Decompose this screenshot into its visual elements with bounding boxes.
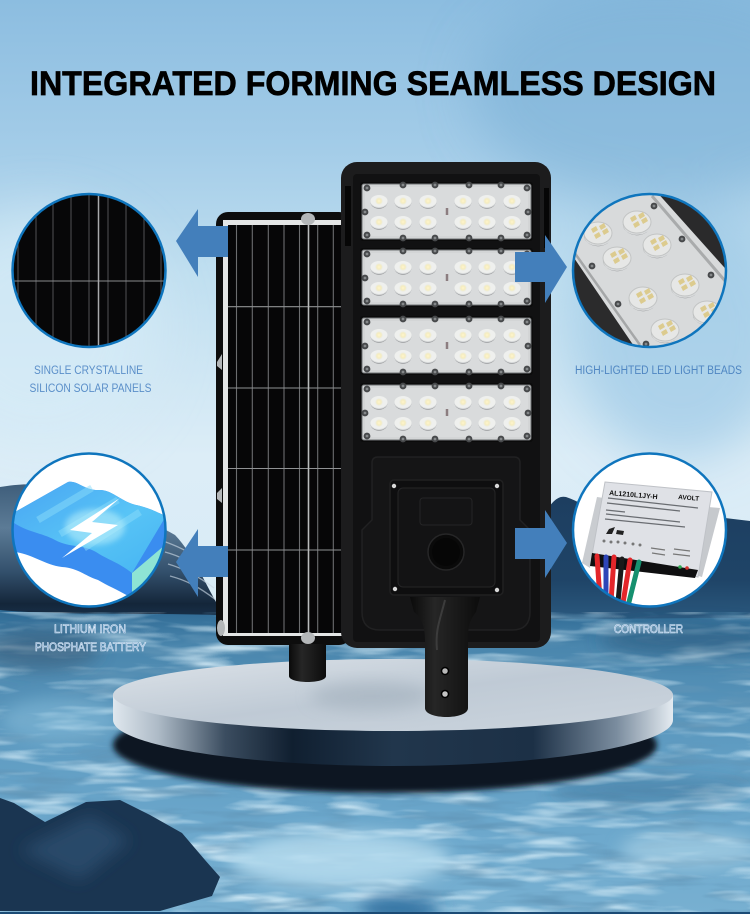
label: battery [35, 624, 146, 654]
title: INTEGRATED FORMING SEAMLESS DESIGN [30, 65, 716, 103]
bottom edge [0, 912, 750, 914]
background: ripples [0, 612, 750, 914]
LED module 1 [360, 182, 533, 241]
battery box cover [362, 457, 530, 630]
panel clips [217, 213, 315, 644]
LED module 3 [360, 316, 533, 375]
LED module 4 [360, 383, 533, 442]
background: water haze [0, 624, 750, 914]
label: solar panels: SILICON SOLAR PANELS [30, 383, 152, 395]
solar panel [216, 212, 351, 645]
label: controller: CONTROLLER [614, 624, 683, 636]
detail: controller: AL1210L1JY-H [609, 490, 658, 501]
arrow: to solar panel detail [176, 209, 228, 277]
detail: solar panel cells [10, 190, 170, 350]
junction box [390, 480, 503, 595]
arrow: to LED detail [515, 235, 567, 303]
background: water [0, 610, 750, 914]
front pole mount [410, 597, 480, 717]
background: sky tint [0, 0, 750, 460]
rock highlight [20, 815, 130, 880]
LED module 2 [360, 248, 533, 307]
platform [113, 659, 673, 793]
label: solar panels [30, 365, 152, 395]
detail: battery [5, 454, 166, 606]
label: battery: LITHIUM IRON [54, 624, 126, 636]
label: battery: PHOSPHATE BATTERY [35, 642, 146, 654]
arrow: to battery detail [176, 529, 228, 597]
rock foreground [0, 798, 220, 911]
mountain streaks [160, 540, 216, 600]
arrow: to controller detail [515, 510, 567, 578]
detail: controller: AVOLT [678, 494, 699, 503]
lamp head [341, 162, 551, 648]
background: left mountain [0, 484, 222, 630]
label: solar panels: SINGLE CRYSTALLINE [34, 365, 143, 377]
background: right mountain [540, 497, 750, 635]
detail: controller [573, 454, 726, 610]
rear pole [289, 644, 326, 682]
detail: LED close-up [572, 192, 728, 348]
